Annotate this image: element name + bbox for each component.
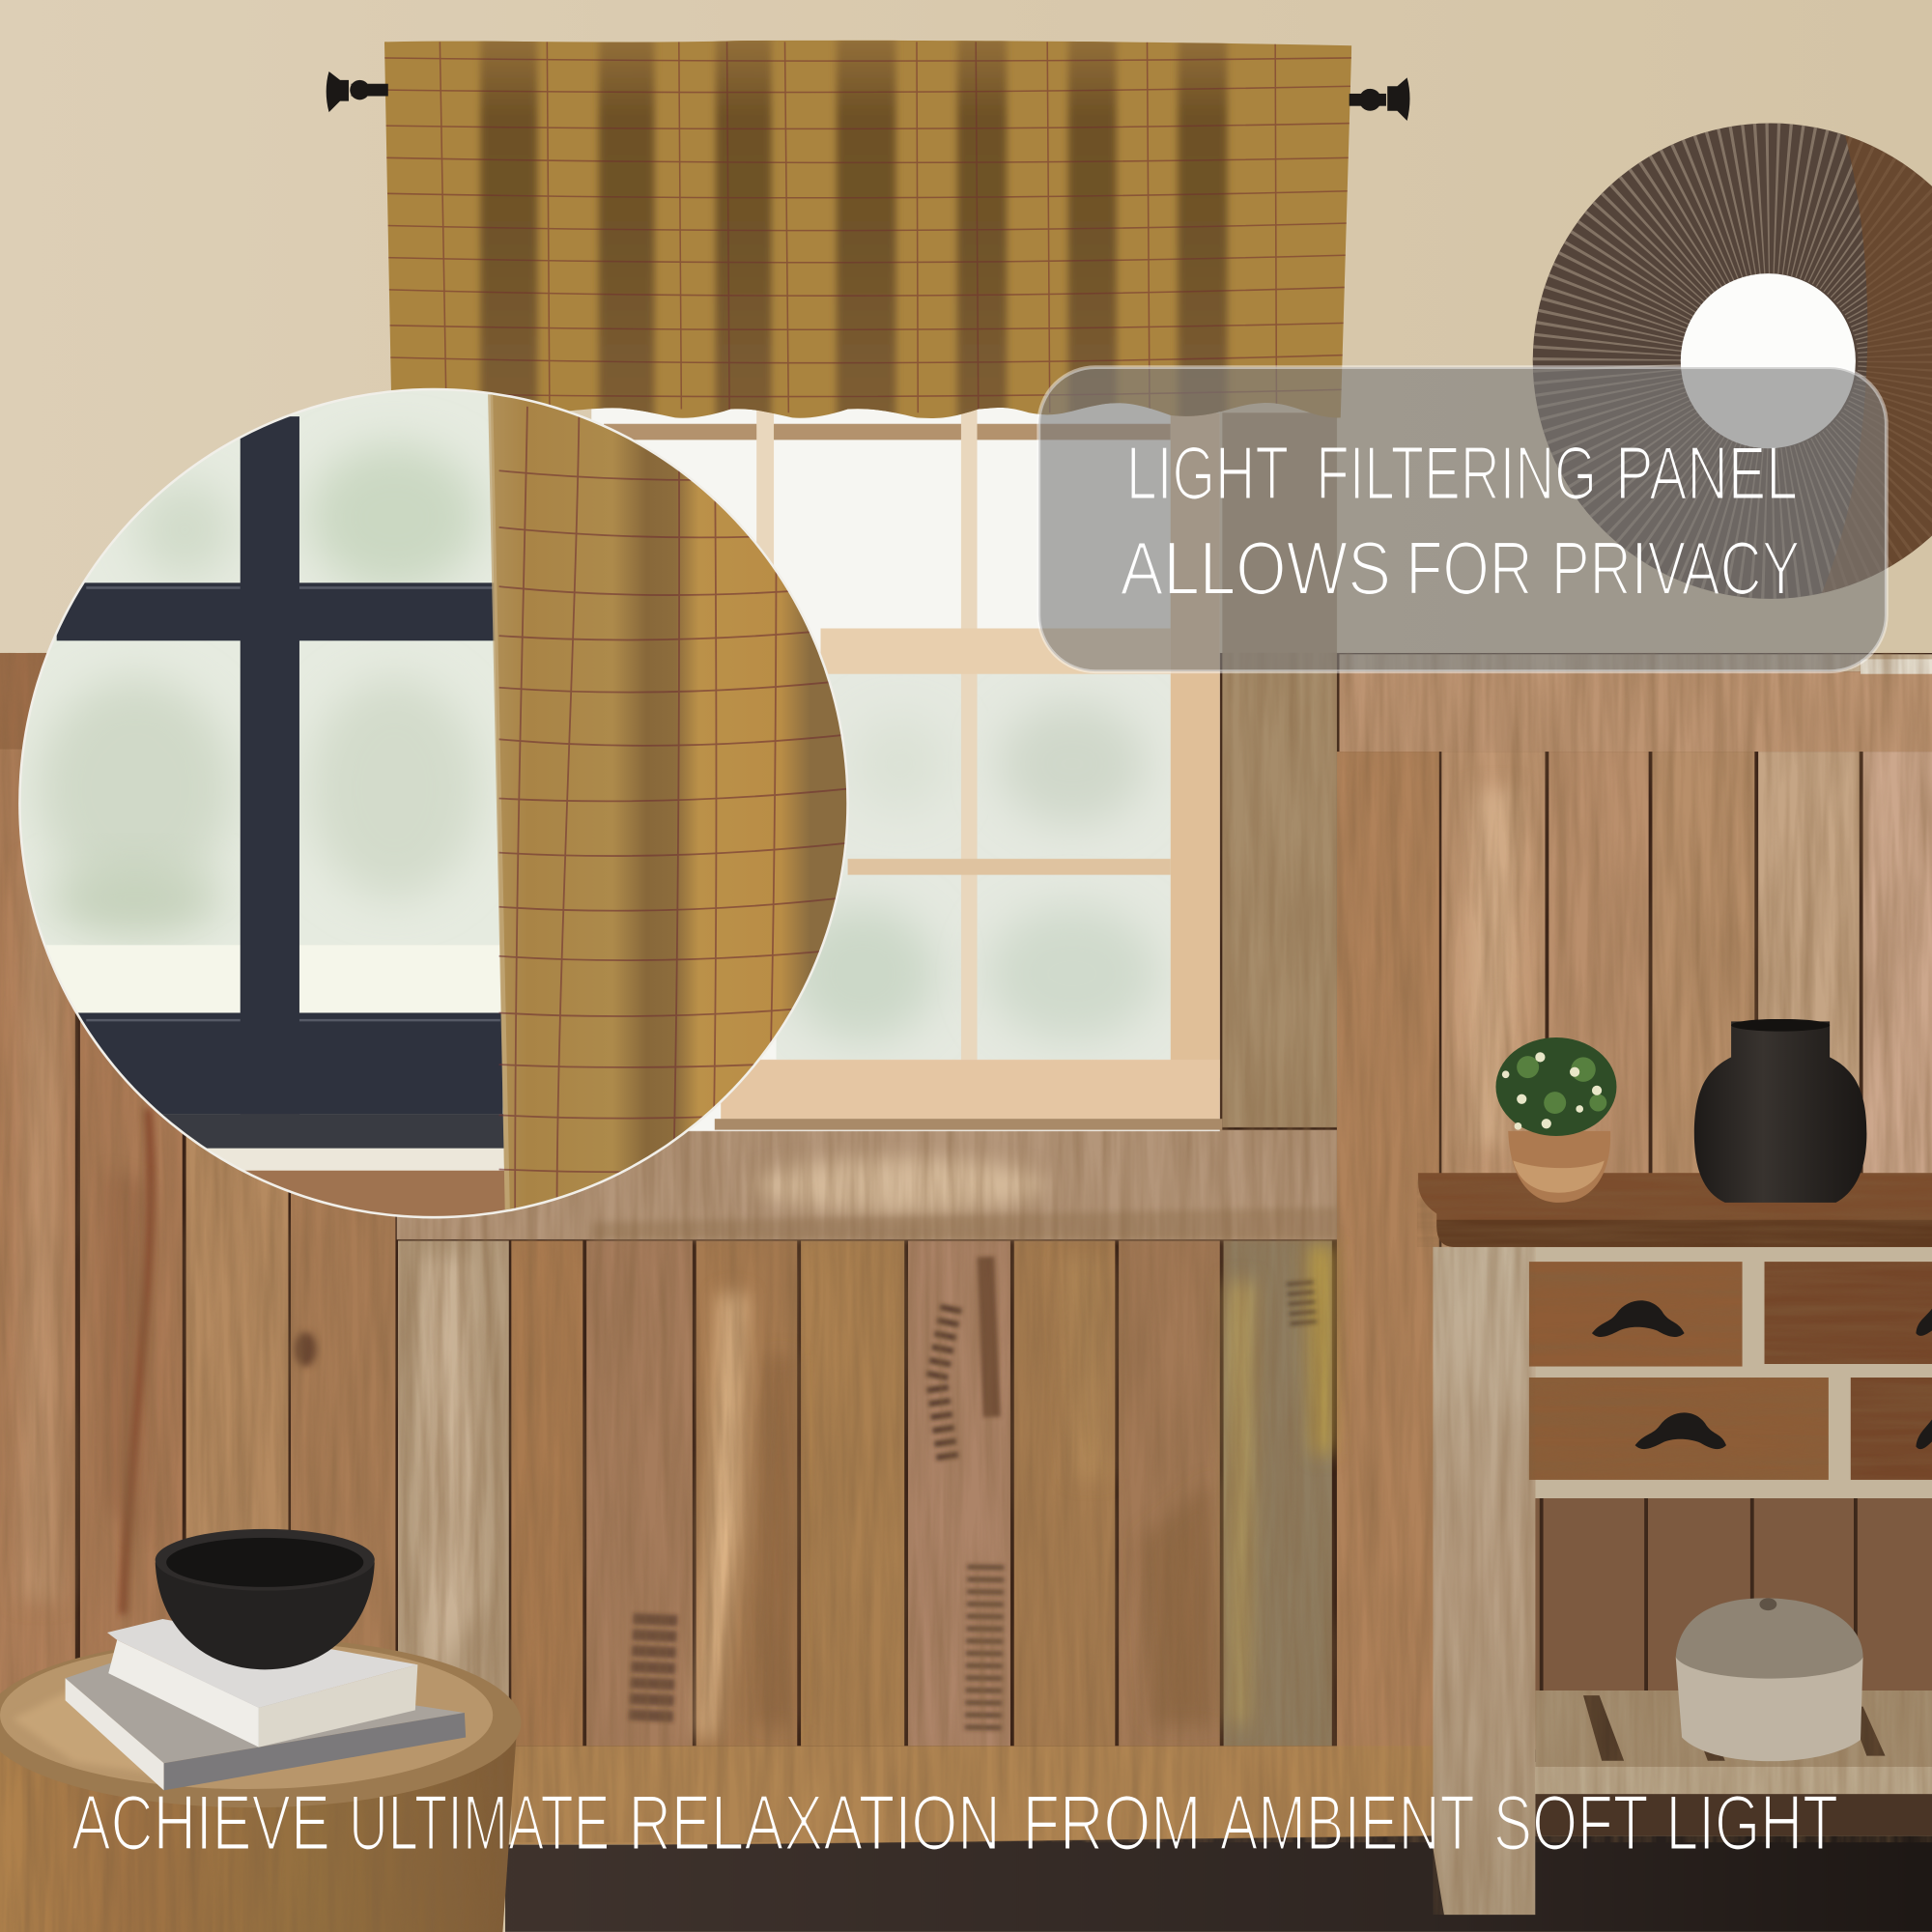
drawer wood grain [1417,1173,1932,1481]
wall background [0,0,1932,659]
table top [1418,1173,1932,1247]
console table [1417,1173,1932,1918]
callout text line 1: FILTERING [1316,433,1597,516]
callout text line 1: LIGHT [1126,433,1289,516]
bottom caption: SOFT [1493,1780,1649,1867]
upper book [107,1619,417,1747]
top drawer left [1529,1262,1743,1367]
bottom caption [71,1780,1838,1867]
black vase [1694,1019,1866,1203]
leg and shelf grain [1433,1247,1932,1918]
stacked books [66,1619,466,1790]
round sunburst mirror [1533,124,1932,616]
curtain close-up [491,389,863,1220]
window sill board [397,1130,1337,1239]
callout text line 2: PRIVACY [1551,527,1801,611]
magnified detail circle [0,388,863,1226]
window [591,397,1222,1131]
callout text line 1: PANEL [1615,433,1798,516]
bottom caption: AMBIENT [1220,1780,1475,1867]
wood grain texture [0,653,1932,1842]
callout text line 1 [1126,433,1798,516]
wood beneath sill [245,1171,505,1216]
table top front edge [1436,1220,1932,1247]
bottom caption: RELAXATION [629,1780,1001,1867]
white sill [203,1149,505,1171]
baseboard [511,1746,1435,1844]
lawn band [46,945,500,1012]
bottom caption: ULTIMATE [349,1780,610,1867]
bottom caption: ACHIEVE [71,1780,330,1867]
callout text line 2: ALLOWS [1120,527,1391,611]
bottom drawer right [1851,1378,1932,1480]
table leg [1433,1247,1535,1915]
translucent callout panel [1038,367,1887,671]
plank streaks and marks [18,788,1528,1737]
bottom caption: FROM [1023,1780,1202,1867]
window casing post [1222,412,1337,1127]
fabric pleats [480,37,1227,431]
frame highlights [86,587,500,1020]
black bowl [156,1529,375,1669]
wooden box on shelf [1676,1598,1863,1761]
callout text line 2: FOR [1406,527,1533,611]
floor [505,1836,1932,1932]
potted plant [1495,1037,1616,1203]
lower book [66,1661,466,1790]
top drawer right [1765,1262,1932,1364]
bottom caption: LIGHT [1665,1780,1838,1867]
drawer handles [1592,1300,1932,1449]
curtain rod left finial [327,71,388,112]
bottom drawer left [1529,1378,1829,1480]
curtain rod right finial [1350,77,1410,121]
wooden stump side table [0,1637,522,1932]
wood wainscot planks [0,653,1932,1762]
plaid lines [384,42,1351,412]
dark window frame [57,416,505,1149]
valance curtain [370,37,1368,431]
dark knot marks [650,1257,1303,1731]
outdoor view [21,390,499,945]
callout text line 2 [1120,527,1801,611]
